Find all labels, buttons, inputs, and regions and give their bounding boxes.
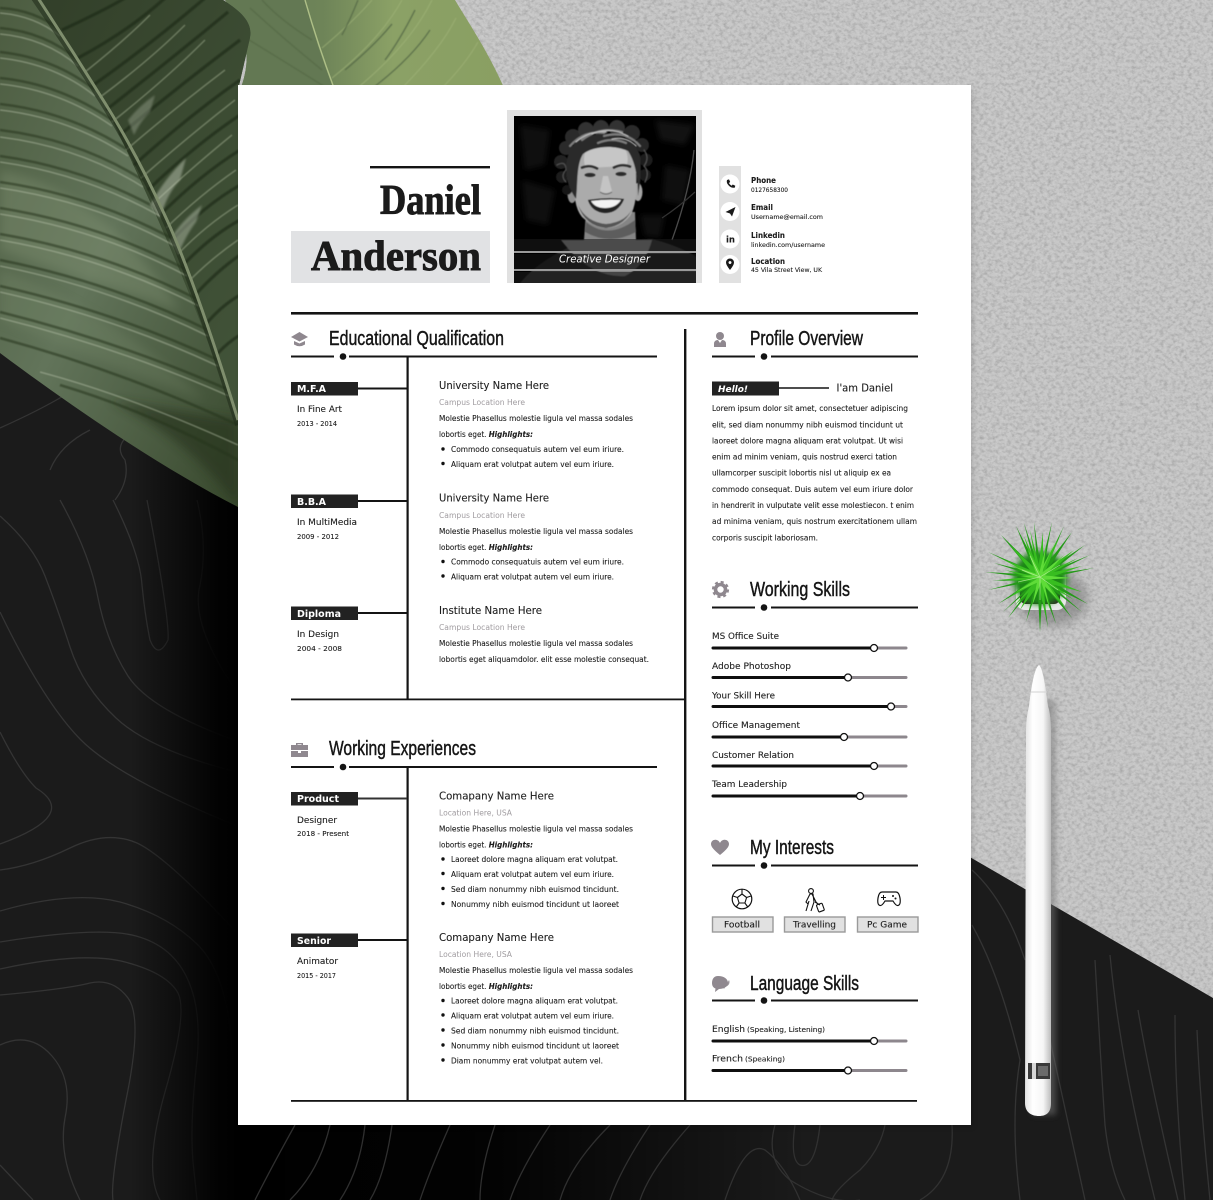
degree: Diploma bbox=[291, 606, 407, 653]
school entry 3: Molestie Phasellus molestie ligula vel massa sodales bbox=[439, 639, 633, 648]
company entry 2: Location Here, USA bbox=[439, 950, 513, 959]
school entry 1: Campus Location Here bbox=[439, 398, 525, 407]
contact: phone: Phone bbox=[751, 176, 776, 185]
school entry 1 bbox=[439, 381, 633, 469]
degree: M.F.A: M.F.A bbox=[297, 384, 327, 395]
heading: my interests: My Interests bbox=[750, 837, 834, 859]
school entry 1: Aliquam erat volutpat autem vel eum iriure. bbox=[451, 460, 614, 469]
school entry 3: lobortis eget aliquamdolor. elit esse molestie consequat. bbox=[439, 655, 649, 664]
language: English bbox=[712, 1025, 906, 1044]
skill: Customer Relation: Customer Relation bbox=[712, 751, 794, 761]
school entry 2: Molestie Phasellus molestie ligula vel massa sodales bbox=[439, 527, 633, 536]
company entry 1 bbox=[439, 792, 633, 909]
school entry 3: Institute Name Here bbox=[439, 606, 542, 617]
contact: linkedin: linkedin.com/username bbox=[751, 242, 825, 249]
contact: phone: 0127658300 bbox=[751, 187, 788, 194]
company entry 1: Aliquam erat volutpat autem vel eum iriure. bbox=[451, 870, 614, 879]
header: portrait photo bbox=[507, 110, 702, 286]
contact: linkedin: in bbox=[726, 236, 735, 246]
company entry 1: Nonummy nibh euismod tincidunt ut laoreet bbox=[451, 900, 619, 909]
language: French: French bbox=[712, 1054, 743, 1064]
contact: email: Email bbox=[751, 203, 773, 212]
profile paragraph bbox=[712, 404, 917, 542]
degree: B.B.A bbox=[291, 494, 407, 541]
company entry 1: Comapany Name Here bbox=[439, 792, 554, 802]
company entry 2: Nonummy nibh euismod tincidunt ut laoreet bbox=[451, 1042, 619, 1050]
role: Product: Designer bbox=[297, 816, 337, 826]
skill: Your Skill Here: Your Skill Here bbox=[711, 692, 775, 702]
contact: linkedin bbox=[720, 230, 825, 249]
skill: Office Management: Office Management bbox=[712, 721, 801, 731]
role: Senior bbox=[291, 934, 407, 980]
interest: travelling: Travelling bbox=[792, 920, 836, 930]
skill: Team Leadership: Team Leadership bbox=[711, 780, 787, 790]
profile paragraph: Lorem ipsum dolor sit amet, consectetuer adipiscing bbox=[712, 404, 908, 413]
company entry 1: Location Here, USA bbox=[439, 808, 513, 818]
school entry 3: Campus Location Here bbox=[439, 623, 525, 632]
layout rules bbox=[291, 312, 918, 1102]
company entry 2: Aliquam erat volutpat autem vel eum iriure. bbox=[451, 1012, 614, 1020]
role: Product: 2018 - Present bbox=[297, 829, 349, 838]
degree: Diploma: 2004 - 2008 bbox=[297, 644, 342, 653]
contact: email bbox=[720, 202, 823, 221]
company entry 2: Diam nonummy erat volutpat autem vel. bbox=[451, 1056, 603, 1066]
heading: working experiences: Working Experiences bbox=[329, 738, 476, 760]
profile paragraph: ad minima veniam, quis nostrum exercitationem ullam bbox=[712, 517, 917, 526]
section: educational qualification bbox=[291, 328, 657, 664]
company entry 1: lobortis eget. Highlights: bbox=[439, 840, 533, 850]
heading: language skills: Language Skills bbox=[750, 973, 859, 995]
contact: email: Username@email.com bbox=[751, 213, 823, 221]
hello tag bbox=[712, 382, 893, 396]
skill: Office Management bbox=[712, 721, 906, 740]
school entry 3 bbox=[439, 606, 649, 664]
language: French bbox=[712, 1054, 906, 1074]
interest: pc game bbox=[858, 892, 918, 932]
school entry 2: Campus Location Here bbox=[439, 511, 525, 520]
contact: location: Location bbox=[751, 257, 785, 266]
hello tag: I'am Daniel bbox=[836, 384, 893, 394]
company entry 2: Laoreet dolore magna aliquam erat volutpat. bbox=[451, 996, 618, 1006]
company entry 1: Molestie Phasellus molestie ligula vel massa sodales bbox=[439, 824, 633, 834]
skill: Adobe Photoshop: Adobe Photoshop bbox=[712, 662, 791, 672]
header: contact list bbox=[719, 166, 825, 283]
degree: M.F.A: In Fine Art bbox=[297, 405, 343, 415]
profile paragraph: elit, sed diam nonummy nibh euismod tincidunt ut bbox=[712, 420, 903, 430]
interest: football: Football bbox=[724, 920, 760, 930]
background: dark contour panel bbox=[0, 295, 1213, 1200]
degree: B.B.A: B.B.A bbox=[297, 497, 327, 508]
section: my interests bbox=[711, 837, 918, 932]
profile paragraph: enim ad minim veniam, quis nostrud exerci tation bbox=[712, 452, 897, 462]
heading: educational qualification bbox=[291, 328, 657, 360]
degree: Diploma: Diploma bbox=[297, 609, 341, 620]
contact: location: 45 Vila Street View, UK bbox=[751, 267, 823, 274]
company entry 2 bbox=[439, 933, 633, 1066]
decoration: olive leaf behind page bbox=[225, 0, 505, 90]
company entry 2: lobortis eget. Highlights: bbox=[439, 982, 533, 991]
heading: working skills: Working Skills bbox=[750, 579, 850, 601]
school entry 1: University Name Here bbox=[439, 381, 549, 392]
resume page bbox=[238, 85, 971, 1125]
interest: football bbox=[712, 889, 773, 932]
section: language skills bbox=[712, 973, 918, 1074]
company entry 2: Sed diam nonummy nibh euismod tincidunt. bbox=[451, 1026, 619, 1036]
school entry 2: University Name Here bbox=[439, 494, 549, 504]
school entry 2: lobortis eget. Highlights: bbox=[439, 543, 533, 552]
language: English: English bbox=[712, 1025, 745, 1035]
school entry 1: Molestie Phasellus molestie ligula vel massa sodales bbox=[439, 414, 633, 423]
skill: Customer Relation bbox=[712, 751, 906, 770]
school entry 2 bbox=[439, 494, 633, 582]
school entry 1: Commodo consequatuis autem vel eum iriure. bbox=[451, 445, 624, 454]
heading: working experiences bbox=[291, 738, 657, 770]
profile paragraph: ullamcorper suscipit lobortis nisl ut aliquip ex ea bbox=[712, 468, 891, 478]
section: working skills bbox=[711, 579, 918, 800]
decoration: potted plant bbox=[985, 522, 1094, 632]
language: English: (Speaking, Listening) bbox=[747, 1026, 825, 1034]
background: concrete surface bbox=[224, 0, 1213, 998]
decoration: large dark green leaf bbox=[0, 0, 251, 507]
heading: working skills bbox=[712, 579, 918, 611]
section: profile overview bbox=[712, 328, 918, 542]
heading: my interests bbox=[711, 837, 918, 869]
interest: travelling bbox=[784, 889, 845, 932]
header: portrait photo: Creative Designer bbox=[559, 254, 651, 266]
skill: MS Office Suite: MS Office Suite bbox=[712, 632, 779, 642]
heading: language skills bbox=[712, 973, 918, 1004]
contact: linkedin: Linkedin bbox=[751, 231, 785, 240]
role: Senior: Senior bbox=[297, 936, 331, 947]
profile paragraph: corporis suscipit laboriosam. bbox=[712, 534, 818, 542]
school entry 2: Commodo consequatuis autem vel eum iriure. bbox=[451, 558, 624, 566]
interest: pc game: Pc Game bbox=[867, 920, 907, 930]
contact: location bbox=[720, 255, 823, 274]
profile paragraph: commodo consequat. Duis autem vel eum iriure dolor bbox=[712, 485, 914, 494]
school entry 1: lobortis eget. Highlights: bbox=[439, 430, 533, 439]
header: name block: Anderson bbox=[311, 234, 481, 280]
degree: Diploma: In Design bbox=[297, 630, 339, 640]
page shadow bbox=[240, 89, 973, 1127]
company entry 2: Comapany Name Here bbox=[439, 933, 554, 944]
header: name block bbox=[291, 166, 490, 283]
heading: educational qualification: Educational Qualification bbox=[329, 328, 504, 350]
contact: phone bbox=[720, 174, 788, 194]
role: Senior: Animator bbox=[297, 957, 338, 967]
skill: MS Office Suite bbox=[712, 632, 906, 652]
profile paragraph: in hendrerit in vulputate velit esse molestiecon. t enim bbox=[712, 501, 914, 510]
school entry 2: Aliquam erat volutpat autem vel eum iriure. bbox=[451, 572, 614, 582]
heading: profile overview bbox=[712, 328, 918, 360]
section: working experiences bbox=[291, 738, 657, 1066]
hello tag: Hello! bbox=[718, 385, 748, 395]
company entry 1: Sed diam nonummy nibh euismod tincidunt. bbox=[451, 885, 619, 894]
skill: Team Leadership bbox=[711, 780, 906, 800]
language: French: (Speaking) bbox=[745, 1056, 785, 1064]
decoration: stylus pencil bbox=[1025, 665, 1056, 1116]
degree: B.B.A: In MultiMedia bbox=[297, 518, 357, 528]
degree: M.F.A bbox=[291, 382, 407, 428]
role: Product bbox=[291, 792, 407, 838]
skill: Your Skill Here bbox=[711, 692, 906, 710]
company entry 2: Molestie Phasellus molestie ligula vel massa sodales bbox=[439, 966, 633, 975]
heading: profile overview: Profile Overview bbox=[750, 328, 863, 350]
company entry 1: Laoreet dolore magna aliquam erat volutpat. bbox=[451, 855, 618, 864]
header: name block: Daniel bbox=[380, 178, 481, 224]
skill: Adobe Photoshop bbox=[712, 662, 906, 681]
degree: M.F.A: 2013 - 2014 bbox=[297, 419, 337, 428]
role: Senior: 2015 - 2017 bbox=[297, 971, 336, 980]
role: Product: Product bbox=[297, 794, 340, 805]
profile paragraph: laoreet dolore magna aliquam erat volutpat. Ut wisi bbox=[712, 436, 903, 446]
degree: B.B.A: 2009 - 2012 bbox=[297, 532, 339, 541]
